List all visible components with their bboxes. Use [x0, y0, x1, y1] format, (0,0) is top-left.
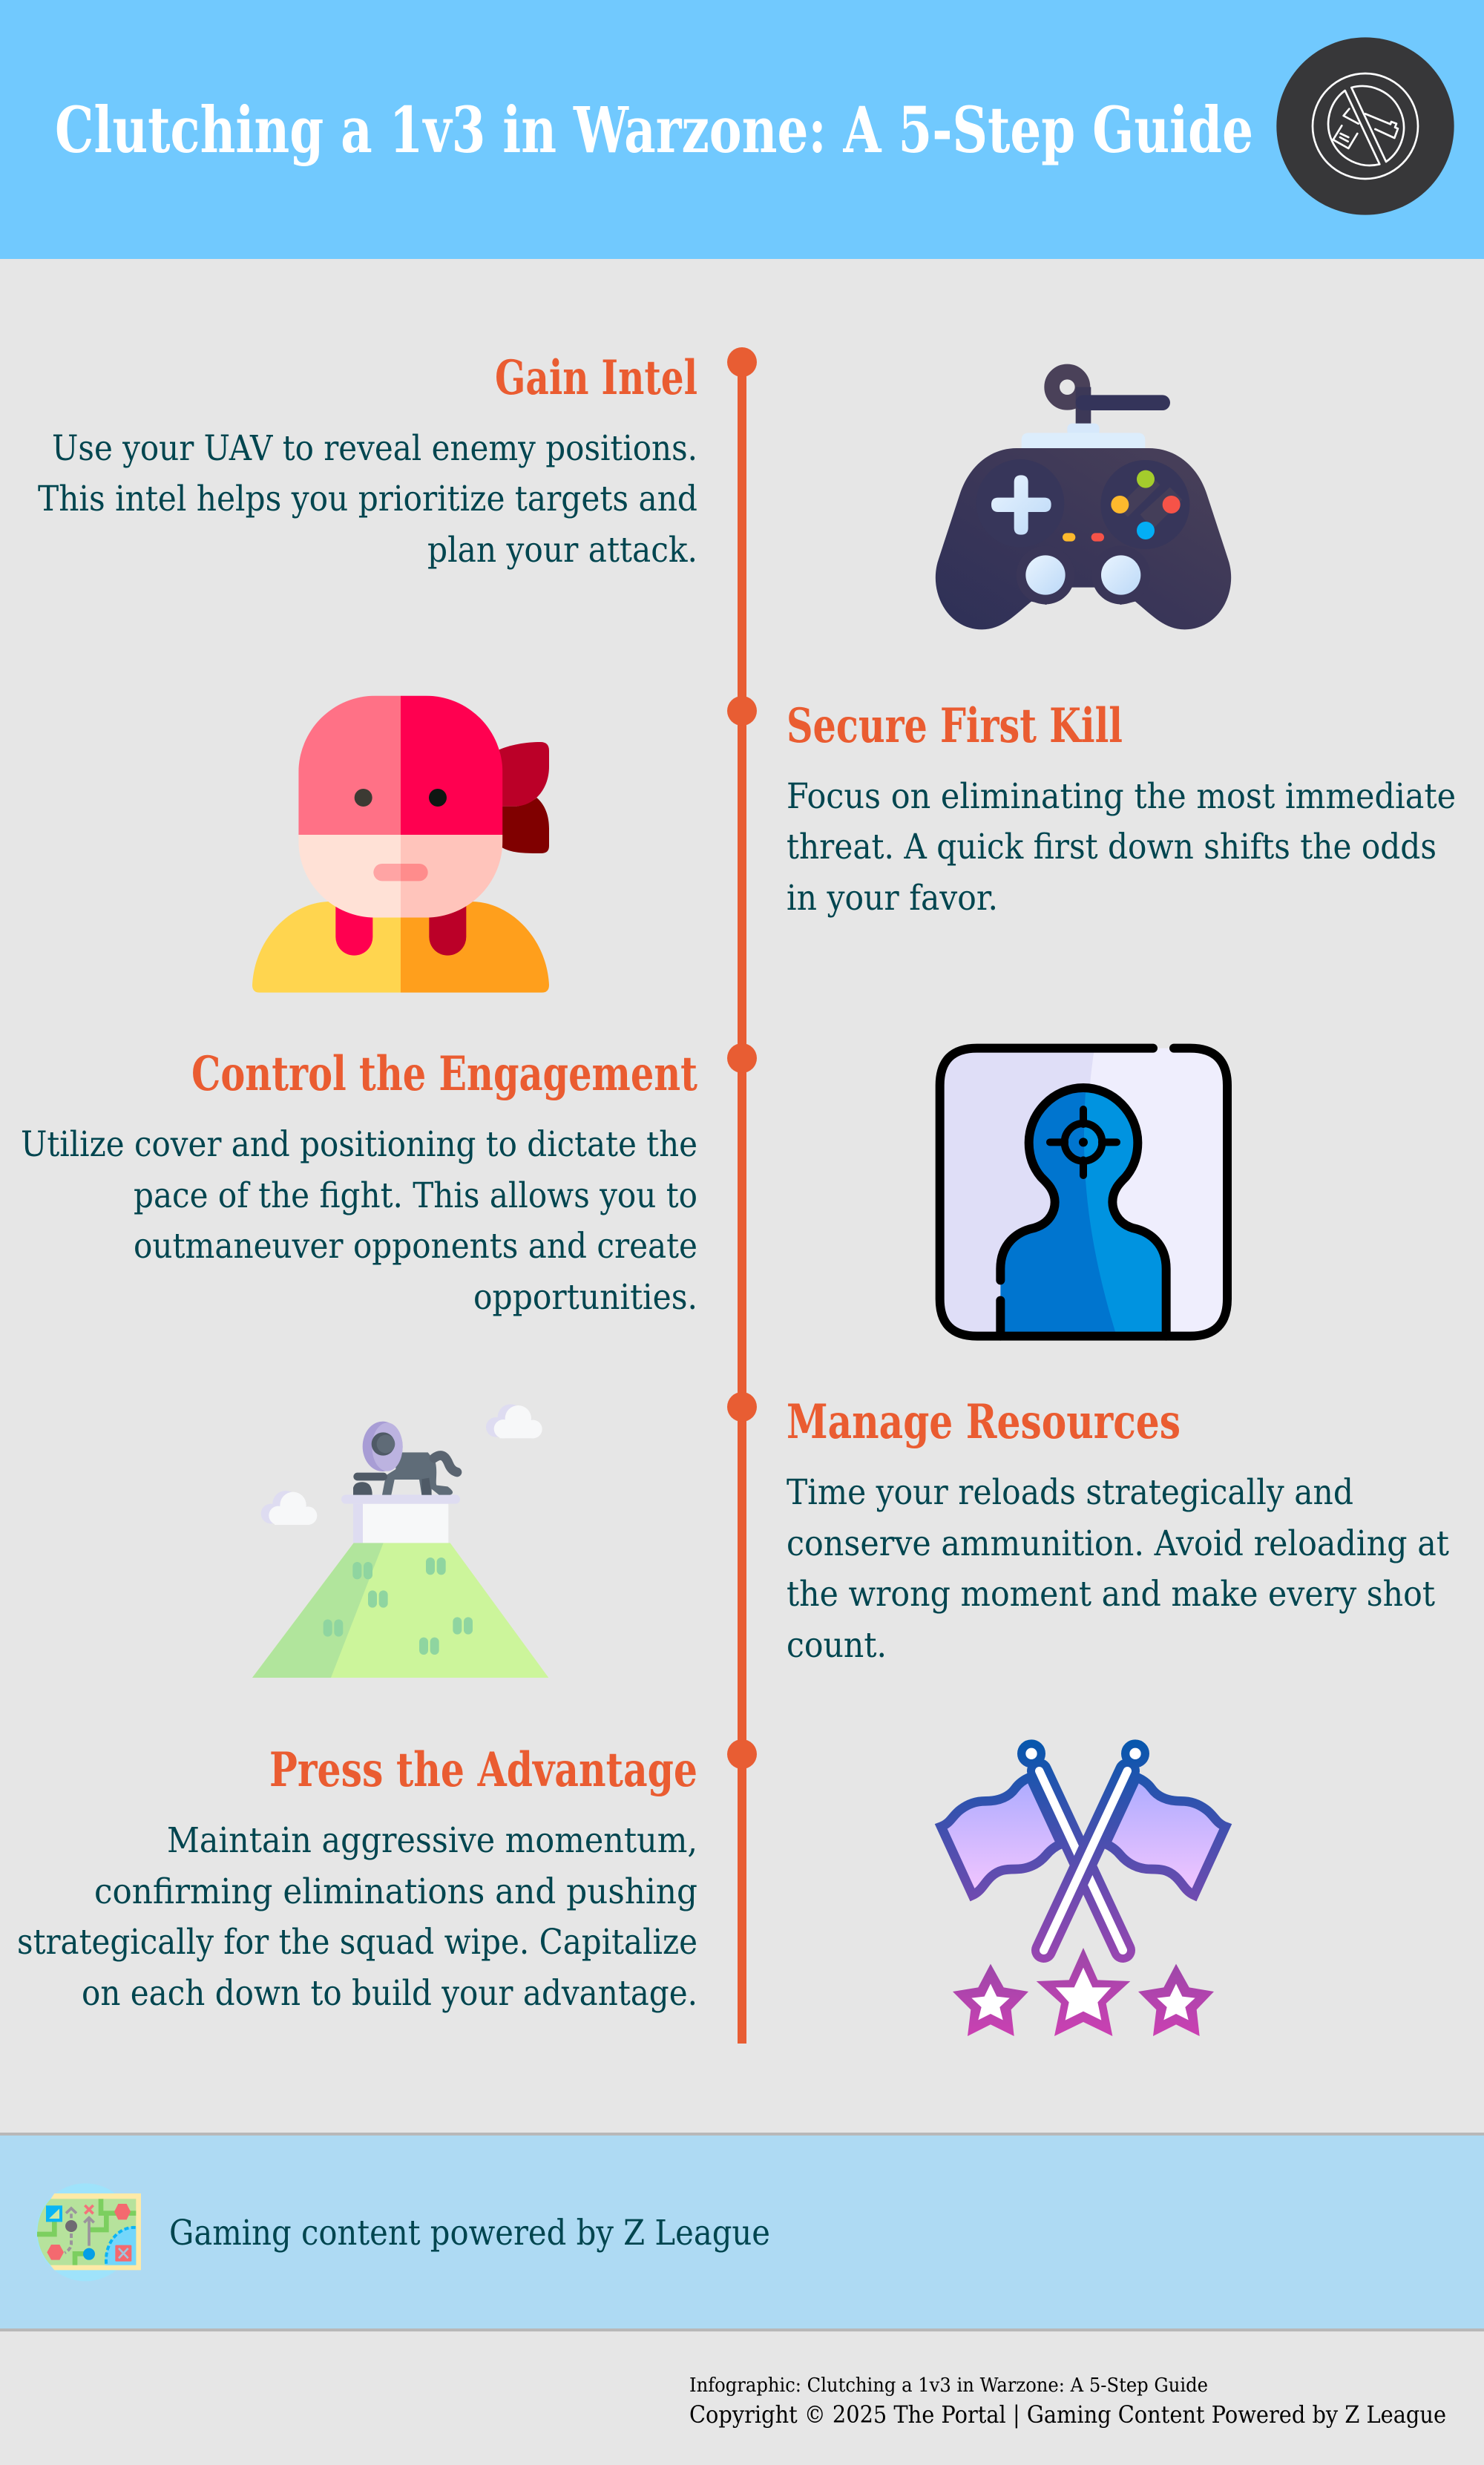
- heading: manage resources: Manage Resources: [787, 1394, 1181, 1450]
- text: control the engagement body: opportunities.: [473, 1277, 697, 1318]
- text: secure first kill body: in your favor.: [787, 878, 998, 919]
- text: gain intel body: plan your attack.: [427, 530, 697, 571]
- text: gain intel body: [38, 428, 697, 571]
- icon: target silhouette: [940, 1048, 1227, 1338]
- header band: [0, 0, 1484, 259]
- text: press the advantage body: [17, 1820, 697, 2014]
- heading: secure first kill: Secure First Kill: [787, 698, 1123, 754]
- text: control the engagement body: outmaneuver opponents and create: [134, 1226, 697, 1267]
- text: press the advantage body: confirming eliminations and pushing: [94, 1871, 697, 1912]
- text: manage resources body: the wrong moment and make every shot: [787, 1574, 1435, 1615]
- icon: crossed flags and stars: [941, 1744, 1226, 2036]
- panel: step 2 secure first kill: [252, 696, 1456, 993]
- text: press the advantage body: strategically for the squad wipe. Capitalize: [17, 1922, 697, 1963]
- footer credits: [689, 2374, 1446, 2429]
- text: control the engagement body: [21, 1124, 697, 1318]
- text: control the engagement body: Utilize cover and positioning to dictate the: [21, 1124, 697, 1165]
- text: gain intel body: This intel helps you prioritize targets and: [38, 479, 697, 519]
- icon: character with bandana: [252, 696, 549, 993]
- panel: step 4 manage resources: [252, 1394, 1449, 1678]
- text: manage resources body: count.: [787, 1625, 887, 1666]
- panel: step 5 press the advantage: [17, 1742, 1226, 2036]
- footer credits: Infographic: Clutching a 1v3 in Warzone: A 5-Step Guide: [689, 2374, 1208, 2397]
- text: press the advantage body: Maintain aggressive momentum,: [167, 1820, 697, 1861]
- text: manage resources body: Time your reloads strategically and: [787, 1472, 1353, 1513]
- heading: gain intel: Gain Intel: [495, 350, 697, 406]
- text: manage resources body: [787, 1472, 1449, 1666]
- icon: tactical map: [36, 2183, 141, 2281]
- icon: panther on mountain: [252, 1404, 548, 1678]
- text: control the engagement body: pace of the fight. This allows you to: [134, 1175, 697, 1216]
- panel: step 3 control the engagement: [21, 1046, 1227, 1338]
- icon: game controller: [936, 372, 1231, 629]
- heading: control the engagement: Control the Engagement: [191, 1046, 697, 1102]
- text: secure first kill body: [787, 776, 1456, 919]
- icon: crossed-out pistol badge: [1276, 37, 1454, 215]
- panel: step 1 gain intel: [38, 350, 1231, 629]
- text: gain intel body: Use your UAV to reveal enemy positions.: [52, 428, 697, 469]
- timeline spine: [727, 347, 757, 2044]
- text: press the advantage body: on each down to build your advantage.: [82, 1973, 697, 2014]
- heading: press the advantage: Press the Advantage: [269, 1742, 697, 1798]
- sponsor text: Gaming content powered by Z League: [169, 2213, 770, 2254]
- sponsor band: [0, 2133, 1484, 2331]
